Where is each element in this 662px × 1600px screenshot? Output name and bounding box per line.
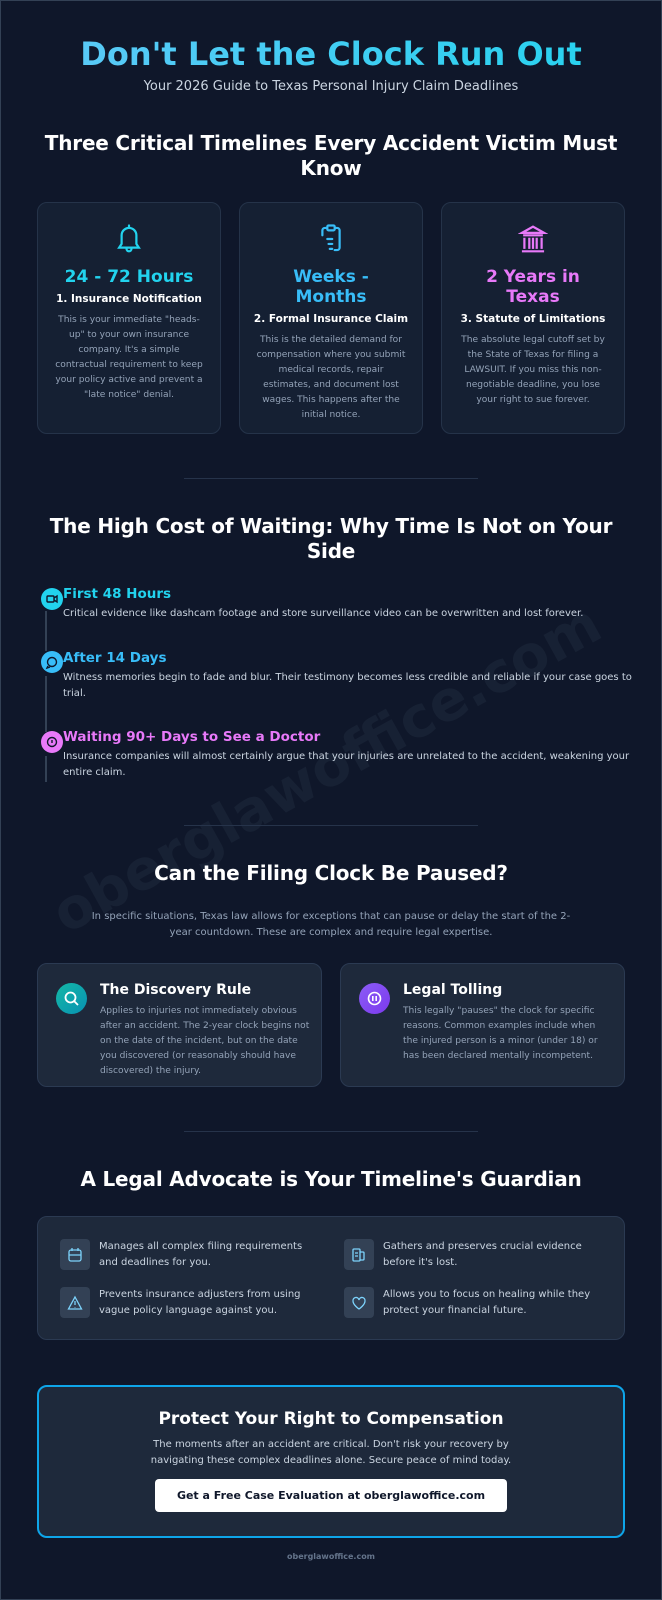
timeline item 3 <box>63 729 630 778</box>
icon: heart <box>344 1287 374 1318</box>
icon: clock dot <box>41 731 63 753</box>
timeline item 1: Critical evidence like dashcam footage and store surveillance video can be overwritten and lost forever. <box>63 608 583 619</box>
CTA heading: Protect Your Right to Compensation <box>158 1409 504 1429</box>
icon: documents <box>344 1239 374 1270</box>
card 3: 2 Years in <box>486 267 580 287</box>
watermark: oberglawoffice.com <box>41 591 612 947</box>
card 2: Months <box>295 287 367 307</box>
card: discovery rule: Applies to injuries not immediately obvious after an accident. The 2-year clock begins not on the date of the incident, but on the date you discovered (or reasonably should have discovered) the injury. <box>100 1006 309 1076</box>
timeline item 2: Witness memories begin to fade and blur. Their testimony becomes less credible and reliable if your case goes to trial. <box>63 672 632 699</box>
card 2: This is the detailed demand for compensation where you submit medical records, repair estimates, and document lost wages. This happens after the initial notice. <box>257 335 405 420</box>
icon: magnifier <box>56 983 87 1014</box>
CTA button: Get a Free Case Evaluation at oberglawoffice.com <box>177 1489 485 1502</box>
card: discovery rule <box>37 963 322 1087</box>
card: legal tolling: This legally "pauses" the clock for specific reasons. Common examples include when the injured person is a minor (under 18) or has been declared mentally incompetent. <box>403 1006 598 1061</box>
icon: chat dot <box>41 651 63 673</box>
card 2 <box>239 202 423 434</box>
footer: oberglawoffice.com <box>287 1552 375 1561</box>
title: Don't Let the Clock Run Out <box>80 35 582 73</box>
icon: camera dot <box>41 588 63 610</box>
heading: advocate: A Legal Advocate is Your Timeline's Guardian <box>80 1167 582 1191</box>
text: Allows you to focus on healing while they protect your financial future. <box>383 1289 590 1316</box>
icon: warning <box>60 1287 90 1318</box>
card 3: 3. Statute of Limitations <box>461 313 605 325</box>
heading: paused: Can the Filing Clock Be Paused? <box>154 861 508 885</box>
timeline item 3: Insurance companies will almost certainly argue that your injuries are unrelated to the accident, weakening your entire claim. <box>63 751 629 778</box>
CTA panel <box>37 1385 625 1538</box>
timeline item 3: Waiting 90+ Days to See a Doctor <box>63 729 320 745</box>
text: Prevents insurance adjusters from using vague policy language against you. <box>99 1289 301 1316</box>
card 2: 2. Formal Insurance Claim <box>254 313 408 325</box>
card: legal tolling: Legal Tolling <box>403 982 502 998</box>
timeline item 1 <box>63 586 583 619</box>
timeline item 2 <box>63 650 632 699</box>
card 3: Texas <box>506 287 560 307</box>
text: Gathers and preserves crucial evidence before it's lost. <box>383 1241 582 1268</box>
card: discovery rule: The Discovery Rule <box>100 982 251 998</box>
card 1: This is your immediate "heads-up" to your own insurance company. It's a simple contractual requirement to keep your policy active and prevent a "late notice" denial. <box>55 315 203 400</box>
card 1 <box>37 202 221 434</box>
card: legal tolling <box>340 963 625 1087</box>
timeline item 2: After 14 Days <box>63 650 167 666</box>
card 3: The absolute legal cutoff set by the State of Texas for filing a LAWSUIT. If you miss this non-negotiable deadline, you lose your right to sue forever. <box>461 335 605 405</box>
icon: courthouse <box>518 225 548 252</box>
title <box>0 33 662 75</box>
intro text: In specific situations, Texas law allows for exceptions that can pause or delay the start of the 2-year countdown. These are complex and require legal expertise. <box>92 911 570 938</box>
icon: clipboard <box>321 224 341 252</box>
CTA text: The moments after an accident are critical. Don't risk your recovery by navigating these complex deadlines alone. Secure peace of mind today. <box>151 1439 511 1466</box>
timeline item 1: First 48 Hours <box>63 586 171 602</box>
card 3 <box>441 202 625 434</box>
CTA button <box>155 1479 507 1512</box>
card 1: 24 - 72 Hours <box>65 267 193 287</box>
icon: calendar <box>60 1239 90 1270</box>
panel: advocate benefits <box>37 1216 625 1340</box>
text: Manages all complex filing requirements and deadlines for you. <box>99 1241 302 1268</box>
subtitle: Your 2026 Guide to Texas Personal Injury Claim Deadlines <box>144 79 518 94</box>
heading: three timelines: Three Critical Timelines Every Accident Victim Must Know <box>45 131 617 180</box>
icon: pause <box>359 983 390 1014</box>
icon: bell <box>117 224 141 252</box>
card 1: 1. Insurance Notification <box>56 293 202 305</box>
heading: high cost: The High Cost of Waiting: Why Time Is Not on Your Side <box>50 514 612 563</box>
card 2: Weeks - <box>293 267 369 287</box>
